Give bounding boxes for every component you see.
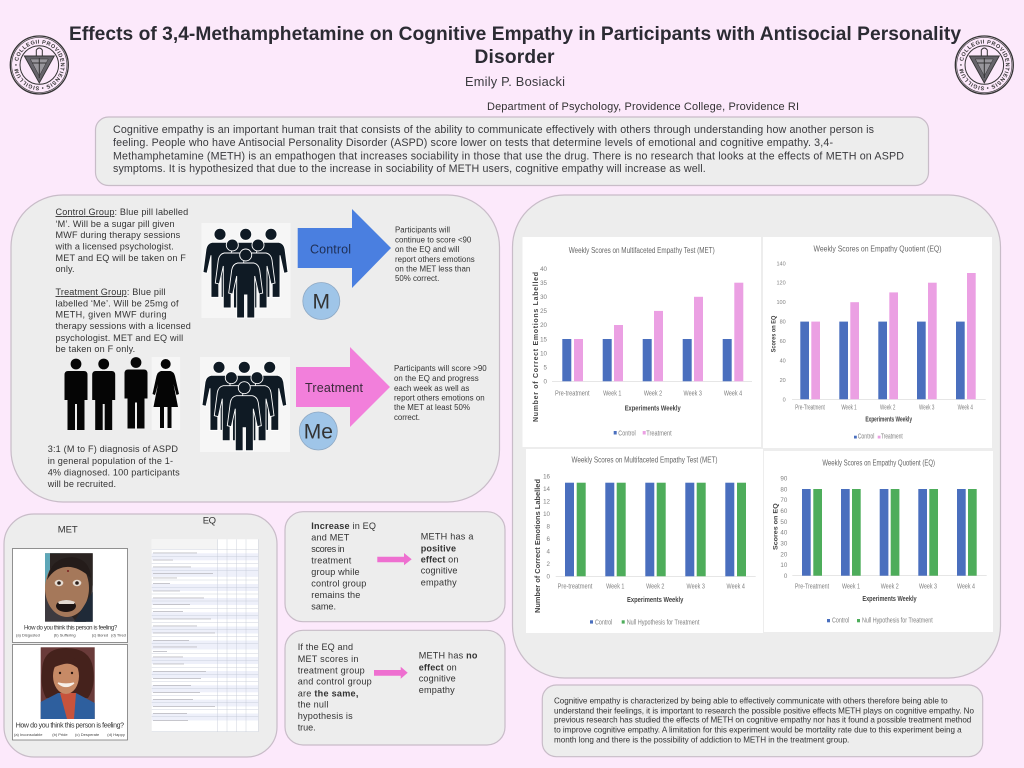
x axis labels: Week 3 [919, 583, 937, 590]
text: same-score condition: are the same, [298, 688, 358, 698]
text: increase condition: group while [311, 567, 360, 577]
y axis ticks: 0 [544, 379, 548, 386]
legend: Control [618, 430, 636, 437]
text: recruitment note: will be recruited. [47, 479, 116, 489]
answer options [16, 633, 126, 638]
icon: left college seal: SIGILLUM • COLLEGII PROVIDENTIENSIS • [14, 40, 65, 90]
text: treatment group description: psychologist. MET and EQ will [56, 333, 183, 343]
y axis ticks: 40 [540, 266, 548, 273]
y axis title: Scores on EQ [772, 315, 778, 352]
text: treatment prediction: the MET at least 50% [394, 403, 470, 412]
y axis ticks: 140 [777, 261, 786, 267]
legend: Treatment [881, 434, 903, 441]
icon: M pill: M [313, 290, 330, 314]
text: no effect conclusion [419, 651, 478, 695]
panel: positive effect outcome [285, 512, 505, 622]
text: increase condition [311, 521, 376, 611]
answer options: (a) Inconsolable [14, 732, 43, 737]
photo: distressed face [45, 553, 93, 622]
text: treatment prediction: each week as well as [394, 384, 469, 393]
chart: treatment MET scores [522, 237, 761, 447]
photo: smiling man [41, 647, 95, 719]
panel: introduction [96, 117, 928, 186]
heading: EQ: EQ [203, 516, 216, 527]
y axis title: Scores on EQ [772, 503, 780, 550]
MET item one [12, 548, 128, 642]
chart title: Weekly Scores on Empathy Quotient (EQ) [814, 244, 942, 253]
text: same-score condition: the null [298, 699, 328, 709]
text: increase condition: remains the [311, 590, 360, 600]
MET item two [12, 644, 128, 740]
text: positive conclusion: positive [421, 543, 456, 553]
x axis labels: Pre-Treatment [795, 583, 829, 590]
caption: How do you think this person is feeling? [16, 722, 124, 729]
answer options [14, 732, 125, 737]
y axis ticks: 10 [543, 511, 551, 518]
text: no effect conclusion: cognitive [419, 674, 456, 684]
y axis ticks: 70 [780, 497, 788, 504]
panel: discussion: month long and there is the possibility of addiction to METH in the treatment group. [554, 735, 849, 744]
icon: Me pill [299, 412, 337, 450]
text: same-score condition: true. [298, 722, 316, 732]
arrow: control: Control [310, 242, 351, 256]
text: recruitment note: in general population of the 1- [48, 456, 173, 466]
y axis ticks: 80 [780, 320, 786, 326]
y axis ticks: 10 [780, 562, 788, 569]
text: positive conclusion [421, 532, 474, 587]
arrow: control [298, 209, 391, 288]
legend [614, 430, 672, 437]
x axis title: Experiments Weekly [862, 596, 917, 603]
text: treatment group description: therapy sessions with a licensed [56, 321, 191, 331]
arrow: treatment: Treatment [305, 381, 364, 395]
y axis ticks: 6 [547, 536, 551, 543]
panel: discussion [542, 685, 983, 757]
y axis ticks: 20 [540, 322, 548, 329]
panel: discussion: understand their feelings, it is important to research the possible positive effects METH plays on cognitive empathy. No [554, 706, 974, 715]
y axis ticks: 8 [547, 523, 551, 530]
answer options: (a) Disgusted [16, 633, 40, 638]
legend: Control [858, 434, 875, 441]
icon: sex ratio figures [64, 357, 180, 430]
chart: null hypothesis EQ scores [764, 451, 993, 632]
text: increase condition: same. [311, 601, 336, 611]
text: same-score condition [298, 642, 372, 732]
text: positive conclusion: empathy [421, 577, 457, 587]
y axis ticks: 60 [780, 339, 786, 345]
bars [800, 273, 976, 399]
text: control group description: Control Group: Blue pill labelled [56, 207, 188, 217]
text: control group description: only. [56, 264, 74, 274]
legend: Null Hypothesis for Treatment [862, 618, 933, 625]
legend: Treatment [646, 430, 672, 437]
text: control prediction: on the EQ and will [395, 245, 460, 254]
x axis labels [795, 583, 975, 590]
title: Disorder [474, 47, 555, 68]
answer options: (c) Bored [92, 633, 108, 638]
text: treatment prediction: on the EQ and progress [394, 374, 479, 383]
text: control group description [54, 207, 188, 274]
chart title: Weekly Scores on Multifaceted Empathy Test (MET) [569, 246, 715, 255]
x axis labels: Pre-Treatment [795, 405, 825, 412]
x axis labels: Week 1 [842, 583, 860, 590]
text: recruitment note: 4% diagnosed. 100 participants [48, 468, 180, 478]
y axis ticks [780, 476, 788, 580]
text: treatment group description: be taken on F only. [56, 344, 135, 354]
x axis labels: Week 2 [646, 584, 665, 591]
panel: MET and EQ measures [4, 514, 277, 757]
chart title: Weekly Scores on Multifaceted Empathy Test (MET) [572, 456, 718, 465]
text: same-score condition: treatment group [298, 665, 365, 675]
chart title: Weekly Scores on Empathy Quotient (EQ) [822, 459, 935, 468]
answer options: (c) Desperate [75, 732, 100, 737]
text: treatment group description [56, 287, 191, 354]
y axis ticks: 40 [780, 358, 786, 364]
text: no effect conclusion: METH has no [419, 651, 478, 661]
y axis title: Number of Correct Emotions Labelled [535, 479, 542, 613]
text: control prediction: continue to score <90 [395, 236, 472, 245]
title [69, 24, 961, 68]
text: recruitment note [47, 444, 180, 489]
text: control group description: ‘M’. Will be a sugar pill given [56, 219, 174, 229]
bars [562, 283, 743, 381]
x axis labels: Week 4 [727, 584, 745, 591]
text: treatment prediction: Participants will score >90 [394, 364, 487, 373]
x axis labels [555, 391, 742, 398]
panel: introduction: symptoms. It is hypothesized that due to the increase in sociability of METH users, cognitive empathy will increase as well. [113, 163, 706, 175]
icon: right college seal: SIGILLUM • COLLEGII PROVIDENTIENSIS • [959, 40, 1010, 90]
panel: discussion: Cognitive empathy is characterized by being able to effectively communicate with others therefore being able to [554, 697, 948, 706]
text: control prediction: on the MET less than [395, 264, 470, 274]
y axis ticks: 90 [780, 476, 788, 483]
panel: discussion: previous research has studied the effects of METH on cognitive empathy nor has it found a possible treatment method [554, 716, 971, 725]
icon: control group crowd [202, 223, 290, 318]
y axis ticks: 16 [543, 473, 551, 480]
text: increase condition: control group [311, 579, 366, 589]
text: same-score condition: hypothesis is [298, 711, 353, 721]
panel: discussion: to improve cognitive empathy. A limitation for this experiment would be mortality rate due to this experiment being a [554, 725, 962, 734]
y axis ticks: 10 [540, 350, 548, 357]
y axis ticks: 14 [543, 486, 551, 493]
x axis title: Experiments Weekly [627, 597, 683, 604]
y axis ticks: 120 [777, 281, 786, 287]
text: treatment group description: Treatment Group: Blue pill [56, 287, 166, 297]
x axis title: Experiments Weekly [625, 406, 681, 413]
y axis ticks: 25 [540, 308, 548, 315]
y axis ticks: 50 [780, 519, 788, 526]
icon: treatment group crowd [200, 357, 290, 452]
legend: Control [595, 619, 613, 626]
y axis ticks: 12 [543, 498, 551, 505]
x axis labels: Week 3 [684, 391, 702, 398]
department affiliation: Department of Psychology, Providence College, Providence RI [487, 101, 799, 113]
answer options: (d) Happy [107, 732, 125, 737]
text: control group description: MET and EQ will be taken on F [56, 253, 186, 263]
x axis labels: Week 4 [958, 405, 973, 412]
y axis ticks: 100 [777, 300, 786, 306]
y axis ticks: 5 [544, 364, 548, 372]
y axis ticks: 0 [783, 397, 786, 403]
text: no effect conclusion: effect on [419, 662, 457, 672]
x axis labels: Week 3 [919, 405, 934, 412]
text: increase condition: treatment [311, 555, 352, 565]
y axis ticks [777, 261, 786, 403]
x axis labels: Week 1 [841, 405, 857, 412]
y axis ticks: 4 [547, 548, 551, 556]
y axis ticks: 35 [540, 280, 548, 287]
x axis labels: Week 3 [687, 584, 705, 591]
text: no effect conclusion: empathy [419, 685, 455, 695]
x axis labels: Week 4 [957, 583, 975, 590]
text: same-score condition: and control group [298, 677, 372, 687]
chart: treatment EQ scores [763, 237, 992, 448]
text: treatment prediction: report others emotions on [394, 394, 485, 402]
panel: introduction: Cognitive empathy is an important human trait that consists of the ability to communicate effectively with others through understanding how another person is [113, 124, 874, 136]
author name: Emily P. Bosiacki [465, 74, 565, 89]
icon: Me pill: Me [304, 420, 333, 444]
text: increase condition: scores in [311, 544, 345, 554]
text: treatment group description: labelled ‘Me’. Will be 25mg of [56, 298, 179, 308]
x axis labels: Week 1 [606, 584, 625, 591]
y axis ticks [540, 266, 548, 386]
y axis ticks: 2 [547, 561, 551, 568]
heading: MET: MET [58, 525, 78, 536]
text: positive conclusion: cognitive [421, 566, 457, 576]
EQ questionnaire table [152, 539, 258, 732]
y axis ticks [543, 473, 551, 581]
x axis labels [558, 584, 745, 591]
x axis labels: Week 4 [724, 391, 742, 398]
text: positive conclusion: METH has a [421, 532, 474, 542]
caption: How do you think this person is feeling? [24, 624, 118, 631]
answer options: (b) Pride [52, 732, 68, 737]
x axis labels: Week 2 [880, 405, 895, 412]
x axis labels: Week 1 [603, 391, 622, 398]
text: treatment group description: METH, given MWF during [56, 310, 166, 320]
text: control prediction: report others emotions [395, 255, 475, 264]
panel: null hypothesis outcome [285, 630, 505, 745]
y axis ticks: 15 [540, 336, 548, 343]
legend: Null Hypothesis for Treatment [627, 619, 699, 626]
text: treatment prediction: correct. [394, 413, 420, 422]
text: control group description: with a licensed psychologist. [54, 242, 174, 252]
icon: M pill [303, 282, 340, 320]
y axis ticks: 30 [780, 540, 788, 548]
chart: null hypothesis MET scores [526, 449, 763, 633]
text: positive conclusion: effect on [421, 554, 458, 564]
legend [827, 618, 933, 625]
panel: results charts [512, 195, 1000, 678]
legend [854, 434, 903, 441]
y axis ticks: 20 [780, 551, 788, 558]
y axis ticks: 40 [780, 530, 788, 537]
y axis ticks: 20 [780, 378, 786, 384]
y axis title: Number of Correct Emotions Labelled [533, 272, 540, 422]
x axis labels: Pre-treatment [555, 391, 590, 398]
panel: methods [11, 195, 500, 502]
text: treatment prediction [394, 364, 487, 422]
text: same-score condition: MET scores in [298, 654, 358, 664]
panel: introduction: Methamphetamine (METH) is an empathogen that increases sociability in those that use the drug. There is no research that looks at the effects of METH on ASPD [113, 150, 904, 162]
x axis labels: Week 2 [881, 583, 899, 590]
text: control prediction [395, 226, 475, 283]
y axis ticks: 30 [540, 294, 548, 301]
x axis labels [795, 405, 973, 412]
x axis title: Experiments Weekly [865, 416, 912, 423]
title: Effects of 3,4-Methamphetamine on Cognitive Empathy in Participants with Antisocial Personality [69, 24, 961, 45]
legend [590, 619, 699, 626]
y axis ticks: 0 [784, 573, 788, 580]
text: control group description: MWF during therapy sessions [56, 230, 181, 240]
text: same-score condition: If the EQ and [298, 642, 353, 652]
y axis ticks: 0 [547, 574, 551, 581]
text: control prediction: 50% correct. [395, 274, 439, 283]
panel: introduction: feeling. People who have Antisocial Personality Disorder (ASPD) score lower on tests that determine levels of emotional and cognitive empathy. 3,4- [113, 137, 833, 149]
answer options: (b) Suffering [54, 633, 76, 638]
answer options: (d) Tired [111, 633, 126, 638]
legend: Control [832, 618, 850, 625]
arrow: treatment [296, 347, 390, 427]
arrow [377, 553, 412, 565]
y axis ticks: 60 [780, 508, 788, 515]
text: increase condition: and MET [311, 533, 350, 543]
text: control prediction: Participants will [395, 226, 450, 235]
x axis labels: Pre-treatment [558, 584, 592, 591]
y axis ticks: 80 [780, 486, 788, 493]
bars [565, 483, 746, 576]
bars [802, 489, 977, 576]
text: recruitment note: 3:1 (M to F) diagnosis of ASPD [48, 444, 178, 454]
x axis labels: Week 2 [644, 391, 662, 398]
text: increase condition: Increase in EQ [311, 521, 376, 531]
arrow [374, 667, 408, 679]
